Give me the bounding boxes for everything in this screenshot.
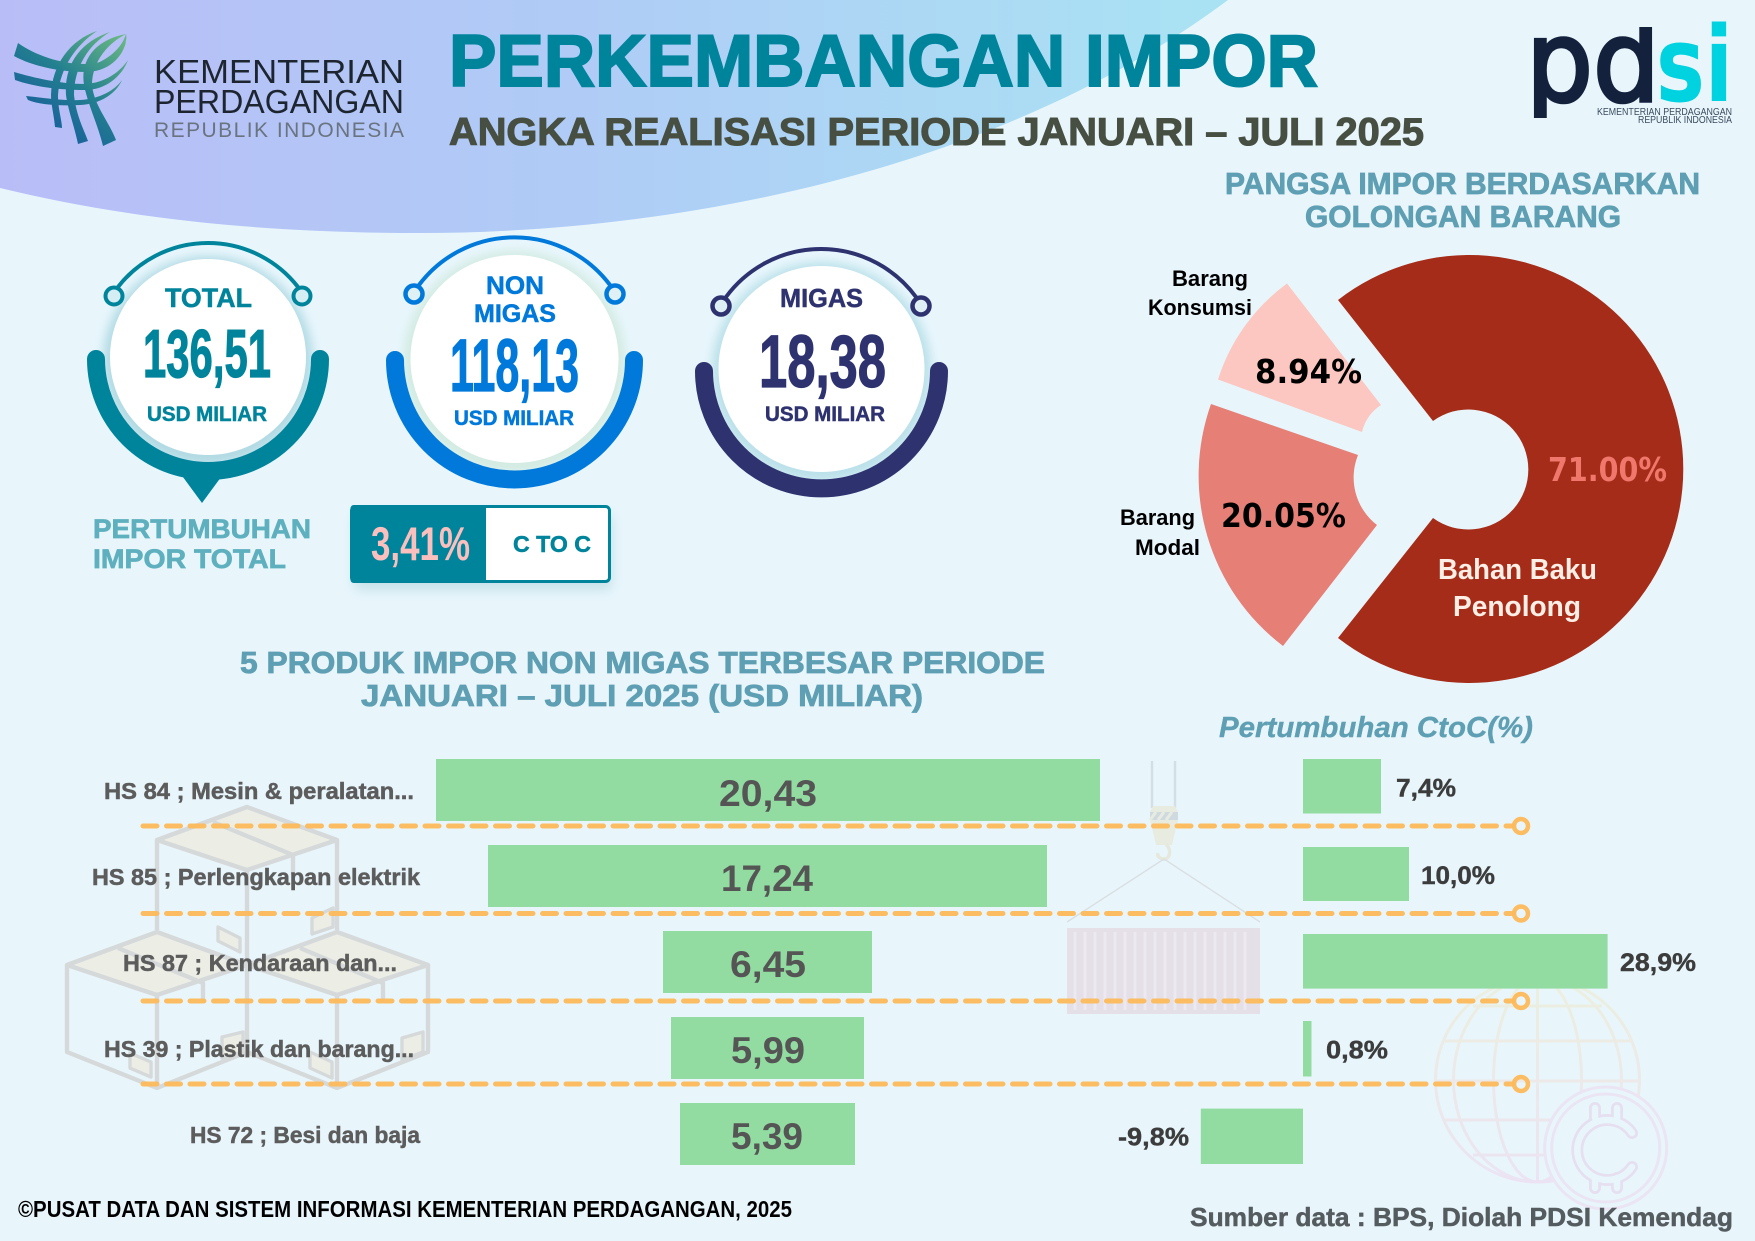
growth values: 7,4% <box>1396 774 1456 802</box>
gauge text: 18,38 <box>759 320 886 403</box>
gauge text <box>143 283 271 426</box>
gauge arc <box>704 249 939 488</box>
logo wordmark: PERDAGANGAN <box>154 83 404 120</box>
product labels: HS 72 ; Besi dan baja <box>190 1122 420 1148</box>
watermark icon: stacked boxes <box>67 807 428 1088</box>
heading: top five products: JANUARI – JULI 2025 (USD MILIAR) <box>361 678 923 713</box>
pie labels: Penolong <box>1453 591 1581 623</box>
heading: top five products: 5 PRODUK IMPOR NON MIGAS TERBESAR PERIODE <box>240 645 1045 680</box>
pie labels: Barang <box>1120 505 1195 530</box>
header background shape <box>0 0 1228 233</box>
callout: growth box: 3,41% <box>371 517 470 570</box>
gauge arc <box>395 237 634 479</box>
bar values <box>719 773 817 1157</box>
pie labels: 20.05% <box>1221 496 1346 535</box>
icon: woven leaf mark <box>14 31 128 146</box>
gauge: oil and gas imports <box>704 249 939 488</box>
bar values: 5,39 <box>731 1116 803 1157</box>
logo wordmark <box>154 53 404 142</box>
gauge text: MIGAS <box>780 283 863 313</box>
heading: import share <box>1225 166 1700 234</box>
watermark icon: crane and container <box>1067 761 1260 1014</box>
bar values: 17,24 <box>721 858 813 899</box>
logo: PDSI: pd <box>1526 0 1660 128</box>
callout: growth box: C TO C <box>513 531 591 557</box>
product labels: HS 85 ; Perlengkapan elektrik <box>92 864 420 890</box>
pie labels: 8.94% <box>1255 352 1362 391</box>
heading: top five products <box>240 645 1045 713</box>
coin symbol <box>1577 1108 1632 1188</box>
growth values: 0,8% <box>1326 1036 1388 1064</box>
gauge text: MIGAS <box>474 300 556 328</box>
logo wordmark: REPUBLIK INDONESIA <box>154 119 404 142</box>
title: PERKEMBANGAN IMPOR <box>449 21 1318 102</box>
heading: total import growth: IMPOR TOTAL <box>93 544 286 574</box>
heading: growth column: Pertumbuhan CtoC(%) <box>1219 712 1533 744</box>
bar chart: import value <box>436 759 1100 1165</box>
growth values <box>1118 774 1696 1152</box>
pie chart: import share by goods category <box>1120 255 1683 683</box>
logo: PDSI: KEMENTERIAN PERDAGANGAN <box>1597 107 1732 118</box>
watermark icon: globe with coin <box>1435 978 1667 1209</box>
gauge text: NON <box>486 272 544 300</box>
slice: consumer goods <box>1218 284 1381 432</box>
gauge arc and pointer <box>96 243 320 503</box>
pie labels <box>1120 266 1667 623</box>
bar values: 6,45 <box>730 944 806 985</box>
gauge: total imports <box>96 243 320 503</box>
growth values: 28,9% <box>1620 949 1696 977</box>
gauge text: TOTAL <box>165 283 252 313</box>
slice: raw materials <box>1338 255 1683 683</box>
logo: PDSI <box>1534 22 1732 123</box>
slice: capital goods <box>1199 404 1377 646</box>
footer: source: Sumber data : BPS, Diolah PDSI Kemendag <box>1190 1202 1733 1232</box>
logo wordmark: KEMENTERIAN <box>154 53 404 90</box>
bar chart: growth <box>1118 759 1696 1164</box>
growth values: 10,0% <box>1421 862 1495 890</box>
pie labels: Konsumsi <box>1148 295 1252 320</box>
gauge text <box>450 272 579 430</box>
heading: total import growth: PERTUMBUHAN <box>93 514 311 544</box>
pie labels: Modal <box>1135 535 1200 560</box>
gauge text: USD MILIAR <box>765 403 885 426</box>
product labels: HS 39 ; Plastik dan barang... <box>104 1036 414 1062</box>
heading: import share: PANGSA IMPOR BERDASARKAN <box>1225 166 1700 201</box>
gauge text: USD MILIAR <box>147 403 267 426</box>
product labels: HS 84 ; Mesin & peralatan... <box>104 778 414 804</box>
logo: PDSI: REPUBLIK INDONESIA <box>1638 115 1732 126</box>
separators <box>143 819 1528 1091</box>
footer: copyright: ©PUSAT DATA DAN SISTEM INFORMASI KEMENTERIAN PERDAGANGAN, 2025 <box>18 1196 792 1222</box>
growth values: -9,8% <box>1118 1124 1189 1152</box>
heading: import share: GOLONGAN BARANG <box>1305 199 1621 234</box>
gauge: non-oil and gas imports <box>395 237 634 479</box>
subtitle: ANGKA REALISASI PERIODE JANUARI – JULI 2025 <box>449 111 1424 154</box>
logo: PDSI: si <box>1656 4 1733 126</box>
pie labels: Barang <box>1172 266 1248 291</box>
pie labels: 71.00% <box>1548 450 1667 489</box>
bar values: 5,99 <box>731 1030 805 1071</box>
bar values: 20,43 <box>719 773 817 814</box>
callout: growth box <box>350 505 612 590</box>
product labels <box>92 778 420 1148</box>
pie labels: Bahan Baku <box>1438 554 1597 586</box>
heading: total import growth <box>93 514 311 574</box>
product labels: HS 87 ; Kendaraan dan... <box>123 950 397 976</box>
gauge text: USD MILIAR <box>454 407 574 430</box>
gauge text <box>759 283 886 426</box>
gauge text: 136,51 <box>143 316 271 392</box>
gauge text: 118,13 <box>450 324 579 407</box>
logo: Kementerian Perdagangan <box>14 31 404 146</box>
